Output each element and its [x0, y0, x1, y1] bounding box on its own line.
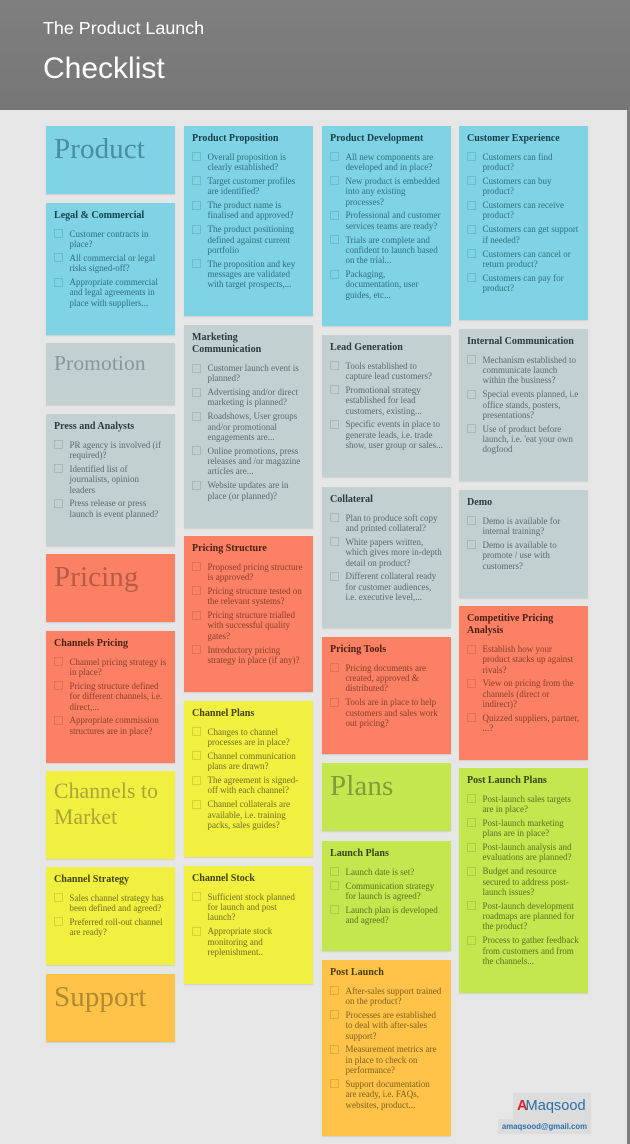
panel: Competitive Pricing Analysis: Competitive Pricing	[467, 612, 553, 624]
panel: Customer Experience: return product?	[482, 259, 538, 269]
panel: Product Proposition: The proposition and key	[208, 259, 295, 269]
panel: Marketing Communication: and/or promotional	[208, 422, 277, 432]
right edge bar	[627, 110, 630, 1144]
panel: Channel Plans: packs, sales guides?	[208, 820, 280, 830]
panel: Product Development: Packaging,	[346, 269, 385, 279]
logo: AMaqsood: AMaqsood	[517, 1098, 586, 1114]
panel: Channel Stock: Sufficient stock planned	[208, 892, 295, 902]
panel: Launch Plans: Launch Plans	[330, 848, 389, 858]
panel: Plans title	[322, 763, 451, 831]
panel: Press and Analysts: launch is event planned?	[70, 509, 158, 519]
panel: Product Proposition	[184, 126, 313, 316]
panel: Collateral: detail on product?	[346, 558, 410, 568]
panel: Pricing Structure: the relevant systems?	[208, 596, 284, 606]
panel: Post Launch Plans: Process to gather feedback	[482, 935, 579, 945]
panel: Pricing Tools	[322, 637, 451, 754]
panel: Post Launch Plans: the product?	[482, 921, 527, 931]
panel: Legal & Commercial: place?	[70, 239, 92, 249]
panel: Product Proposition: are identified?	[208, 186, 259, 196]
panel: Channel Stock: launch?	[208, 912, 235, 922]
panel: Legal & Commercial: Appropriate commercial	[70, 277, 158, 287]
panel: Press and Analysts: Press release or press	[70, 498, 146, 508]
panel: Channel Stock: Channel Stock	[192, 872, 255, 884]
panel: Marketing Communication: releases and /or magazine	[208, 456, 300, 466]
panel: Press and Analysts: PR agency is involved (if	[70, 440, 161, 450]
panel: Channel Plans: The agreement is signed-	[208, 775, 298, 785]
panel: Internal Communication: presentations?	[482, 410, 534, 420]
panel: Product Development: services teams are ready?	[346, 221, 437, 231]
panel: Channel Strategy: Channel Strategy	[54, 874, 129, 884]
panel: Competitive Pricing Analysis: View on pricing from the	[482, 678, 573, 688]
panel: Press and Analysts: required)?	[70, 450, 106, 460]
panel: Marketing Communication: Advertising and/or direct	[208, 387, 298, 397]
panel: Competitive Pricing Analysis: channels (direct or	[482, 689, 549, 699]
panel: Customer Experience: product?	[482, 210, 514, 220]
panel: Pricing Structure: Introductory pricing	[208, 645, 280, 655]
panel: Collateral: for customer audiences,	[346, 582, 431, 592]
panel: Post Launch Plans: Post Launch Plans	[467, 774, 547, 786]
panel: Channel Stock: for launch and post	[208, 902, 277, 912]
panel: Channels Pricing: for different channels, i.e.	[70, 691, 162, 701]
panel: Internal Communication: launch, i.e. 'eat your own	[482, 434, 573, 444]
panel: Pricing Structure: Pricing structure trialled	[208, 610, 295, 620]
panel: Customer Experience: Customer Experience	[467, 132, 560, 144]
panel: Plans title: Plans	[330, 770, 393, 802]
panel: Product Proposition: The product positioning	[208, 224, 294, 234]
panel: Demo: customers?	[482, 561, 523, 571]
panel: Post Launch Plans: the channels...	[482, 956, 534, 966]
panel: Press and Analysts: Identified list of	[70, 464, 128, 474]
panel: Channel Stock: replenishment..	[208, 947, 263, 957]
panel: Post Launch: Processes are established	[346, 1010, 436, 1020]
panel: Channel Plans: processes are in place?	[208, 737, 290, 747]
panel: Pricing Tools: customers and sales work	[346, 708, 438, 718]
panel: Post Launch: Measurement metrics are	[346, 1044, 436, 1054]
panel: Customer Experience: Customers can pay for	[482, 273, 564, 283]
panel: Pricing title	[46, 554, 175, 622]
panel: Channel Plans: Channel communication	[208, 751, 296, 761]
panel: Channels to Market title	[46, 771, 175, 859]
contact email	[498, 1119, 591, 1134]
panel: Pricing Structure: Proposed pricing structure	[208, 562, 302, 572]
panel: Collateral: which gives more in-depth	[346, 547, 442, 557]
panel: Post Launch Plans: Budget and resource	[482, 866, 556, 876]
panel: Post Launch: performance?	[346, 1065, 395, 1075]
panel: Pricing Structure: gates?	[208, 631, 230, 641]
panel: Product Development: guides, etc...	[346, 290, 391, 300]
panel: Product Proposition: with target prospects,...	[208, 279, 291, 289]
panel: Marketing Communication	[184, 325, 313, 528]
panel: Marketing Communication: Website updates are in	[208, 480, 288, 490]
panel: Channels Pricing	[46, 631, 175, 763]
panel: Demo	[459, 490, 588, 598]
panel: Internal Communication: Special events planned, i.e	[482, 389, 578, 399]
panel: Marketing Communication: marketing is planned?	[208, 397, 287, 407]
header band	[0, 0, 630, 110]
panel: Legal & Commercial: All commercial or legal	[70, 253, 155, 263]
panel: Channel Strategy: Preferred roll-out channel	[70, 917, 162, 927]
panel: Marketing Communication: Communication	[192, 344, 261, 355]
panel: Product Proposition: clearly established?	[208, 162, 278, 172]
panel: Launch Plans: Launch plan is developed	[346, 905, 438, 915]
panel: Post Launch Plans: Post-launch sales targets	[482, 794, 571, 804]
panel: Product title	[46, 126, 175, 194]
panel: Marketing Communication: Online promotions, press	[208, 446, 298, 456]
logo: AMaqsood	[513, 1093, 591, 1119]
panel: Collateral: Plan to produce soft copy	[346, 513, 437, 523]
panel: Product Development: documentation, user	[346, 279, 418, 289]
panel: Post Launch: on the product?	[346, 996, 401, 1006]
panel: Channel Strategy: been defined and agreed?	[70, 903, 161, 913]
panel: Promotion title: Promotion	[54, 351, 146, 375]
panel: Internal Communication: Use of product before	[482, 424, 561, 434]
panel: Demo: internal training?	[482, 526, 544, 536]
panel: Post Launch: Support documentation	[346, 1079, 430, 1089]
panel: Pricing Tools: Pricing documents are	[346, 663, 426, 673]
panel: Channels Pricing: direct,...	[70, 702, 99, 712]
panel: Channel Strategy: are ready?	[70, 927, 107, 937]
panel: Demo: promote / use with	[482, 550, 550, 560]
panel: Channel Plans: Channel Plans	[192, 708, 254, 718]
panel: Customer Experience: Customers can buy	[482, 176, 552, 186]
panel: Collateral: Collateral	[330, 494, 373, 504]
panel: Product Development: on the trial...	[346, 255, 391, 265]
panel: Post Launch Plans: Post-launch analysis and	[482, 842, 572, 852]
panel: Competitive Pricing Analysis: product stacks up against	[482, 654, 573, 664]
panel: Pricing Structure: Pricing structure tested on	[208, 586, 302, 596]
panel: Post Launch: websites, product...	[346, 1100, 415, 1110]
panel: Lead Generation: customers, existing...	[346, 406, 422, 416]
panel: Channels Pricing: Pricing structure defined	[70, 681, 158, 691]
panel: Marketing Communication: engagements are...	[208, 432, 274, 442]
panel: Customer Experience: product?	[482, 283, 514, 293]
panel: Product Proposition: Product Proposition	[192, 132, 278, 144]
panel: Support title	[46, 974, 175, 1042]
panel: Post Launch: Post Launch	[330, 966, 384, 978]
panel: Marketing Communication: place (or planned)?	[208, 491, 277, 501]
panel: Pricing Structure	[184, 536, 313, 692]
panel: Channel Plans: plans are drawn?	[208, 761, 268, 771]
panel: Demo: Demo	[467, 496, 492, 508]
panel: Product Proposition: messages are validated	[208, 269, 290, 279]
panel: Collateral: White papers written,	[346, 537, 423, 547]
panel: Demo: Demo is available for	[482, 516, 560, 526]
panel: Competitive Pricing Analysis	[459, 606, 588, 760]
panel: Product Development: developed and in place?	[346, 162, 432, 172]
panel: Product Proposition: finalised and approved?	[208, 210, 293, 220]
panel: Legal & Commercial: Customer contracts in	[70, 229, 148, 239]
title: The Product Launch: The Product Launch	[43, 18, 204, 38]
panel: Collateral: Different collateral ready	[346, 571, 436, 581]
panel: Post Launch Plans: plans are in place?	[482, 828, 549, 838]
panel: Lead Generation: Specific events in place to	[346, 419, 440, 429]
panel: Internal Communication: within the business?	[482, 375, 556, 385]
panel: Customer Experience	[459, 126, 588, 320]
panel: Product Proposition: The product name is	[208, 200, 281, 210]
panel: Customer Experience: if needed?	[482, 235, 520, 245]
panel: Lead Generation: Tools established to	[346, 361, 417, 371]
panel: Channel Strategy	[46, 867, 175, 965]
panel: Competitive Pricing Analysis: ...?	[482, 723, 493, 733]
panel: Customer Experience: Customers can receive	[482, 200, 564, 210]
panel: Pricing Structure: is approved?	[208, 572, 253, 582]
panel: Post Launch: to deal with after-sales	[346, 1020, 427, 1030]
panel: Product Development: All new components are	[346, 152, 433, 162]
panel: Legal & Commercial: place with suppliers...	[70, 298, 148, 308]
panel: Internal Communication	[459, 329, 588, 481]
panel: Marketing Communication: articles are...	[208, 466, 253, 476]
panel: Pricing Tools: Tools are in place to help	[346, 697, 436, 707]
panel: Post Launch: in place to check on	[346, 1055, 417, 1065]
panel: Product Development	[322, 126, 451, 326]
panel: Product title: Product	[54, 133, 145, 165]
panel: Marketing Communication: Customer launch event is	[208, 363, 299, 373]
panel: Product Development: Professional and customer	[346, 210, 440, 220]
panel: Post Launch: support?	[346, 1031, 376, 1041]
panel: Lead Generation: Promotional strategy	[346, 385, 421, 395]
panel: Legal & Commercial: risks signed-off?	[70, 263, 130, 273]
panel: Legal & Commercial: and legal agreements in	[70, 287, 155, 297]
panel: Marketing Communication: Roadshows, User groups	[208, 411, 297, 421]
panel: Channels Pricing: Channels Pricing	[54, 638, 128, 648]
panel: Customer Experience: product?	[482, 186, 514, 196]
panel: Competitive Pricing Analysis: Analysis	[467, 625, 503, 636]
panel: Launch Plans: Launch date is set?	[346, 867, 414, 877]
panel: Pricing Tools: out pricing?	[346, 718, 389, 728]
panel: Competitive Pricing Analysis: rivals?	[482, 665, 506, 675]
panel: Channel Plans: Channel collaterals are	[208, 799, 290, 809]
panel: Press and Analysts: journalists, opinion	[70, 474, 139, 484]
title: Checklist: Checklist	[43, 52, 165, 85]
panel: Post Launch Plans: Post-launch development	[482, 901, 574, 911]
panel: Legal & Commercial: Legal & Commercial	[54, 210, 144, 220]
panel: Pricing Structure: with successful quality	[208, 620, 290, 630]
panel: Product Proposition: portfolio	[208, 245, 239, 255]
panel: Competitive Pricing Analysis: Quizzed suppliers, partner,	[482, 713, 579, 723]
panel: Post Launch Plans: roadmaps are planned for	[482, 911, 574, 921]
panel: Channels Pricing: Channel pricing strategy is	[70, 657, 166, 667]
panel: Competitive Pricing Analysis: Establish how your	[482, 644, 552, 654]
panel: Customer Experience: Customers can cancel or	[482, 249, 571, 259]
panel: Channel Plans	[184, 701, 313, 857]
panel: Channel Stock: monitoring and	[208, 937, 263, 947]
panel: Pricing Tools: created, approved &	[346, 673, 419, 683]
panel: Internal Communication: dogfood	[482, 444, 512, 454]
panel: Product Development: confident to launch based	[346, 245, 438, 255]
panel: Post Launch	[322, 960, 451, 1136]
panel: Promotion title	[46, 343, 175, 405]
panel: Channel Plans: available, i.e. training	[208, 810, 286, 820]
panel: Collateral: i.e. executive level,...	[346, 592, 422, 602]
panel: Product Development: processes?	[346, 197, 384, 207]
panel: Press and Analysts	[46, 414, 175, 546]
panel: Lead Generation	[322, 335, 451, 477]
panel: Post Launch Plans: evaluations are planned?	[482, 852, 571, 862]
panel: Legal & Commercial	[46, 203, 175, 335]
panel: Internal Communication: communicate launch	[482, 365, 557, 375]
panel: Internal Communication: office stands, posters,	[482, 400, 560, 410]
panel: Product Development: into any existing	[346, 186, 406, 196]
panel: Customer Experience: Customers can find	[482, 152, 552, 162]
panel: Collateral	[322, 487, 451, 628]
panel: Internal Communication: Internal Communication	[467, 336, 574, 346]
panel: Post Launch Plans: launch issues?	[482, 887, 534, 897]
panel: Marketing Communication: planned?	[208, 373, 240, 383]
panel: Channels to Market title: Channels to Market	[54, 779, 158, 829]
panel: Channel Stock	[184, 866, 313, 984]
panel: Launch Plans	[322, 841, 451, 951]
contact email: amaqsood@gmail.com	[502, 1122, 587, 1131]
panel: Channel Plans: Changes to channel	[208, 727, 278, 737]
panel: Channel Stock: Appropriate stock	[208, 926, 272, 936]
panel: Press and Analysts: Press and Analysts	[54, 420, 134, 432]
panel: Post Launch Plans: secured to address post-	[482, 877, 569, 887]
panel: Channels Pricing: structures are in place?	[70, 726, 152, 736]
panel: Post Launch: are ready, i.e. FAQs,	[346, 1089, 419, 1099]
panel: Competitive Pricing Analysis: indirect)?	[482, 699, 517, 709]
panel: Support title: Support	[54, 981, 147, 1013]
panel: Post Launch Plans: are in place?	[482, 804, 528, 814]
panel: Internal Communication: Mechanism established to	[482, 355, 576, 365]
panel: Lead Generation: Lead Generation	[330, 342, 403, 352]
panel: Marketing Communication: Marketing	[192, 332, 238, 342]
panel: Channel Plans: off with each channel?	[208, 785, 289, 795]
panel: Pricing title: Pricing	[54, 561, 138, 593]
panel: Pricing Tools: Pricing Tools	[330, 644, 386, 654]
panel: Post Launch Plans: from customers and from	[482, 946, 574, 956]
panel: Lead Generation: established for lead	[346, 395, 415, 405]
panel: Post Launch: After-sales support trained	[346, 986, 441, 996]
panel: Product Development: New product is embedded	[346, 176, 440, 186]
panel: Pricing Structure: strategy in place (if any)?	[208, 655, 299, 665]
panel: Pricing Tools: distributed?	[346, 683, 388, 693]
panel: Lead Generation: show, user group or sales...	[346, 440, 443, 450]
panel: Channels Pricing: Appropriate commission	[70, 715, 159, 725]
panel: Demo: Demo is available to	[482, 540, 557, 550]
panel: Customer Experience: product?	[482, 162, 514, 172]
panel: Product Development: Product Development	[330, 132, 423, 144]
panel: Launch Plans: for launch is agreed?	[346, 891, 421, 901]
panel: Lead Generation: generate leads, i.e. trade	[346, 430, 432, 440]
panel: Launch Plans: Communication strategy	[346, 881, 434, 891]
panel: Customer Experience: Customers can get support	[482, 224, 578, 234]
panel: Product Proposition: Target customer profiles	[208, 176, 295, 186]
panel: Collateral: and printed collateral?	[346, 523, 426, 533]
panel: Channel Strategy: Sales channel strategy has	[70, 893, 164, 903]
panel: Pricing Structure: Pricing Structure	[192, 542, 267, 554]
panel: Lead Generation: capture lead customers?	[346, 371, 432, 381]
panel: Product Proposition: Overall proposition is	[208, 152, 286, 162]
panel: Product Proposition: defined against current	[208, 235, 290, 245]
panel: Launch Plans: and agreed?	[346, 915, 389, 925]
panel: Product Development: Trials are complete and	[346, 235, 430, 245]
panel: Post Launch Plans	[459, 768, 588, 993]
panel: Press and Analysts: leaders	[70, 485, 95, 495]
panel: Channels Pricing: in place?	[70, 667, 102, 677]
panel: Post Launch Plans: Post-launch marketing	[482, 818, 564, 828]
